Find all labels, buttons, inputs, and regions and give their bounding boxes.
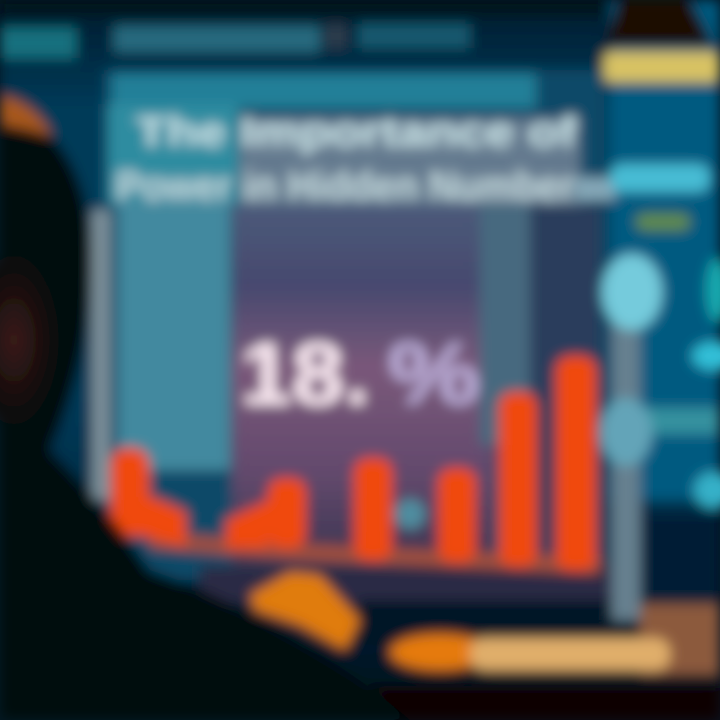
hair rim light xyxy=(0,96,52,136)
ear warm tint xyxy=(0,255,58,425)
desk xyxy=(330,604,720,720)
lower dark strip xyxy=(200,566,620,602)
dark lower zone xyxy=(645,515,720,593)
big number xyxy=(240,324,480,423)
big number: 18. xyxy=(240,324,370,423)
top dark band xyxy=(0,0,620,16)
stand pole xyxy=(612,300,640,620)
screen base xyxy=(104,70,604,580)
orange pile xyxy=(250,572,360,650)
desk front dark xyxy=(330,686,720,720)
left screen edge xyxy=(92,210,110,500)
panel: screen xyxy=(0,24,640,644)
person silhouette xyxy=(0,96,410,720)
light bulb xyxy=(602,254,662,330)
top navigation bar xyxy=(0,24,470,58)
teal heading band xyxy=(112,74,536,108)
grey title backdrop xyxy=(240,118,580,204)
panel: right grey-teal column xyxy=(480,205,530,445)
title: The Importance of xyxy=(136,108,577,155)
green glow xyxy=(706,258,720,322)
right side glow xyxy=(610,0,720,500)
lamp xyxy=(604,0,720,82)
lamp light xyxy=(604,52,720,82)
green label xyxy=(636,214,690,230)
below-screen dark xyxy=(360,600,640,644)
light bar xyxy=(610,164,710,192)
lamp shade xyxy=(606,0,714,46)
teal dot xyxy=(395,499,425,529)
orange glow xyxy=(390,634,490,670)
desk wood xyxy=(640,604,720,674)
title bar tail xyxy=(575,178,615,200)
shoulders xyxy=(0,430,410,720)
bars xyxy=(111,356,596,570)
head xyxy=(0,110,92,470)
panel: dark right column xyxy=(530,205,600,565)
teal area behind title xyxy=(108,104,238,204)
big number: % xyxy=(388,324,480,423)
panel: purple chart area xyxy=(232,205,492,565)
title: Power in Hidden Numbers xyxy=(116,162,596,209)
baseline xyxy=(150,540,600,566)
cyan dot xyxy=(692,342,720,370)
title xyxy=(116,108,596,209)
stand knob xyxy=(600,398,652,466)
right panel elements xyxy=(575,164,720,620)
cream glow xyxy=(470,638,670,670)
mid bar xyxy=(645,408,720,434)
panel: left teal column xyxy=(118,200,230,470)
bar chart xyxy=(111,356,600,570)
lower cyan dot xyxy=(694,472,720,508)
